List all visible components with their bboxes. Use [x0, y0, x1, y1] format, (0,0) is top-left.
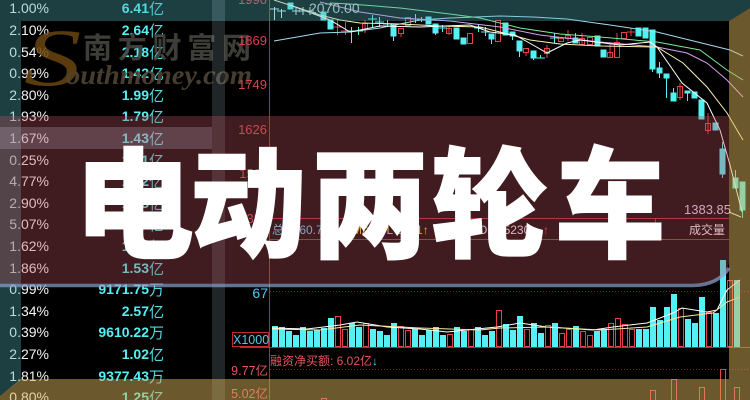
chart axis frame and grid lines [240, 0, 750, 400]
amount column: 1.25 [122, 216, 149, 232]
green moving average [330, 3, 743, 80]
title: 电动两轮车: 车 [555, 110, 665, 283]
amount column: 9377.43 [98, 368, 149, 384]
long moving average, light blue [274, 16, 743, 56]
volume up bars [336, 280, 732, 346]
percentage column: 1.93% [9, 108, 49, 124]
percentage column: 1.67% [9, 130, 49, 146]
percentage column: 2.27% [9, 346, 49, 362]
moving average volume readout: MAVOL 2251↑ [352, 223, 429, 237]
watermark Chinese name: 南方财富网 [83, 32, 251, 65]
volume arrow: ↑ [543, 223, 549, 237]
amount units: 万 [149, 282, 164, 299]
price axis labels: 38 [247, 211, 261, 226]
amount units: 亿 [149, 261, 164, 278]
indicator readouts: 13 [254, 232, 268, 247]
percentage column: 1.62% [9, 238, 49, 254]
pale yellow moving average [274, 0, 743, 140]
price axis labels: 150 [239, 166, 261, 181]
percentage column: 2.80% [9, 87, 49, 103]
amount column: 2.18 [122, 44, 149, 60]
amount units: 亿 [149, 217, 164, 234]
margin financing bars [322, 370, 740, 400]
purple moving average [320, 2, 743, 97]
amount column: 1.25 [122, 195, 149, 211]
percentage column: 1.81% [9, 368, 49, 384]
highlighted table row [0, 127, 212, 149]
price axis labels: 1749 [238, 77, 267, 92]
amount column: 1.32 [122, 173, 149, 189]
amount units [149, 1, 164, 400]
volume panel tag: 成交量 [689, 222, 725, 237]
percentage column: 1.86% [9, 260, 49, 276]
amount units: 亿 [149, 174, 164, 191]
lowest price marker: 1383.85 [684, 202, 731, 217]
percentage column: 1.00% [9, 0, 49, 16]
volume moving average lines [272, 280, 740, 332]
percentage column: 0.99% [9, 65, 49, 81]
amount column: 6.41 [122, 0, 149, 16]
amount units: 亿 [149, 347, 164, 364]
amount units: 万 [149, 325, 164, 342]
price axis labels [238, 0, 267, 226]
amount column: 1.42 [122, 65, 149, 81]
amount column: 1.41 [122, 152, 149, 168]
maroon title band [0, 116, 729, 284]
stock table: percentage and amount columns [9, 0, 164, 400]
watermark: Southmoney logo [24, 12, 252, 103]
margin financing readout: 融资净买额: 6.02亿↓ [270, 353, 378, 368]
frame overlay: translucent vertical stripe [212, 0, 225, 400]
up candles (red, hollow) [333, 18, 710, 134]
volume bars [272, 260, 740, 347]
amount units: 万 [149, 369, 164, 386]
amount units: 亿 [149, 109, 164, 126]
volume readout: VOL 65230 [470, 223, 531, 237]
band outline [0, 268, 729, 286]
title: 电动两轮车: 两 [311, 110, 429, 283]
price axis labels: 1869 [238, 33, 267, 48]
top price marker: ←2070.00 [295, 0, 360, 16]
amount units: 亿 [149, 23, 164, 40]
percentage column: 5.07% [9, 216, 49, 232]
percentage column: 2.90% [9, 195, 49, 211]
amount units: 亿 [149, 153, 164, 170]
percentage column: 0.39% [9, 324, 49, 340]
title: 电动两轮车: 动 [190, 110, 306, 284]
title: 电动两轮车 [74, 109, 665, 284]
amount column: 1.79 [122, 108, 149, 124]
percentage column: 1.34% [9, 303, 49, 319]
percentage column: 0.54% [9, 44, 49, 60]
title: 电动两轮车: 电 [74, 109, 194, 283]
amount units: 亿 [149, 196, 164, 213]
percentage column: 0.99% [9, 281, 49, 297]
watermark big S: S [24, 12, 81, 103]
amount units: 亿 [149, 88, 164, 105]
percentage column: 4.77% [9, 173, 49, 189]
title: 电动两轮车: 轮 [431, 110, 549, 283]
candlestick chart [270, 3, 745, 218]
volume axis labels: 67 [252, 285, 268, 301]
amount column: 9171.75 [98, 281, 149, 297]
volume multiplier box: X1000 [233, 333, 269, 347]
watermark latin name: outhmoney.com [66, 60, 252, 90]
amount units: 亿 [149, 131, 164, 148]
amount column: 1.02 [122, 346, 149, 362]
volume down bars [272, 260, 740, 347]
amount units: 亿 [149, 304, 164, 321]
amount units: 亿 [149, 1, 164, 18]
amount column: 1.99 [122, 87, 149, 103]
white moving average [290, 5, 742, 212]
percentage column: 0.25% [9, 152, 49, 168]
amount column: 2.57 [122, 303, 149, 319]
percentage column: 2.10% [9, 22, 49, 38]
amount column: 1.53 [122, 260, 149, 276]
amount units: 亿 [149, 45, 164, 62]
amount column [98, 0, 149, 400]
moving average lines [274, 0, 743, 212]
amount units: 亿 [149, 66, 164, 83]
indicator readouts [231, 0, 741, 400]
down candles (cyan, filled) [270, 3, 745, 218]
volume indicator readout: 总手:60.7亿 [272, 222, 335, 237]
price axis labels: 1626 [238, 122, 267, 137]
amount column: 9610.22 [98, 324, 149, 340]
amount column: 1.43 [122, 130, 149, 146]
percentage column [9, 0, 49, 400]
amount column: 2.64 [122, 22, 149, 38]
amount column: 1.16 [122, 238, 149, 254]
margin axis labels: 9.77亿 [231, 363, 268, 378]
low price arrow [729, 212, 741, 217]
amount units: 亿 [149, 239, 164, 256]
